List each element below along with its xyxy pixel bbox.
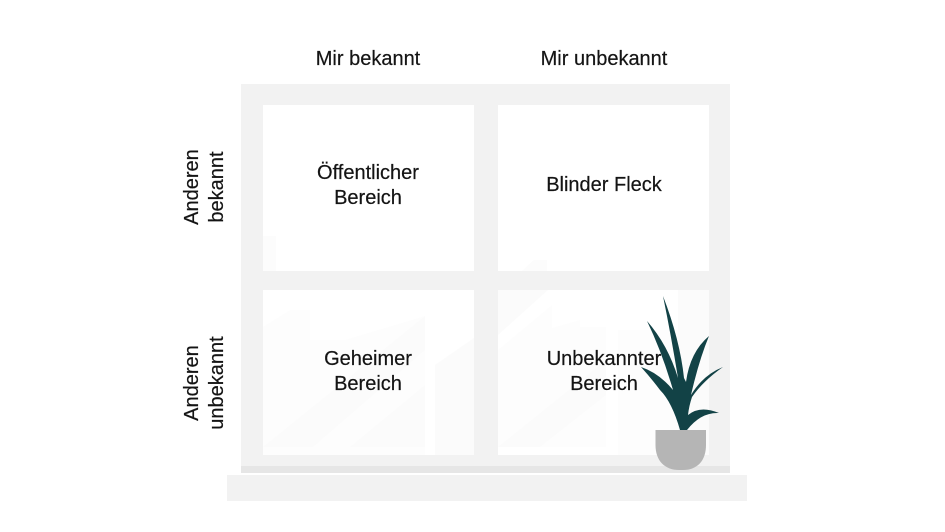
label: Öffentlicher Bereich: Öffentlicher [317,162,419,184]
label: Unbekannter Bereich: Unbekannter [547,348,662,370]
row heading: Anderen unbekannt: unbekannt [206,336,228,430]
pane: Blinder Fleck [498,105,709,271]
label: Geheimer Bereich: Geheimer [324,348,412,370]
window frame [241,84,730,473]
column heading: Mir unbekannt: Mir unbekannt [541,48,668,70]
pane: Unbekannter Bereich [498,290,709,455]
plant leaves [641,296,723,430]
pane: Geheimer Bereich [263,290,474,455]
window sill [227,475,747,501]
icon: potted plant [641,296,723,470]
label: Blinder Fleck: Blinder Fleck [546,174,663,196]
row heading: Anderen unbekannt: Anderen [181,345,203,421]
row heading: Anderen bekannt: bekannt [206,151,228,223]
label: Öffentlicher Bereich: Bereich [334,187,402,209]
row heading: Anderen bekannt: Anderen [181,149,203,225]
label: Unbekannter Bereich: Bereich [570,373,638,395]
pot [656,430,706,470]
label: Geheimer Bereich: Bereich [334,373,402,395]
column heading: Mir bekannt: Mir bekannt [316,48,421,70]
pane: Öffentlicher Bereich [263,105,474,271]
